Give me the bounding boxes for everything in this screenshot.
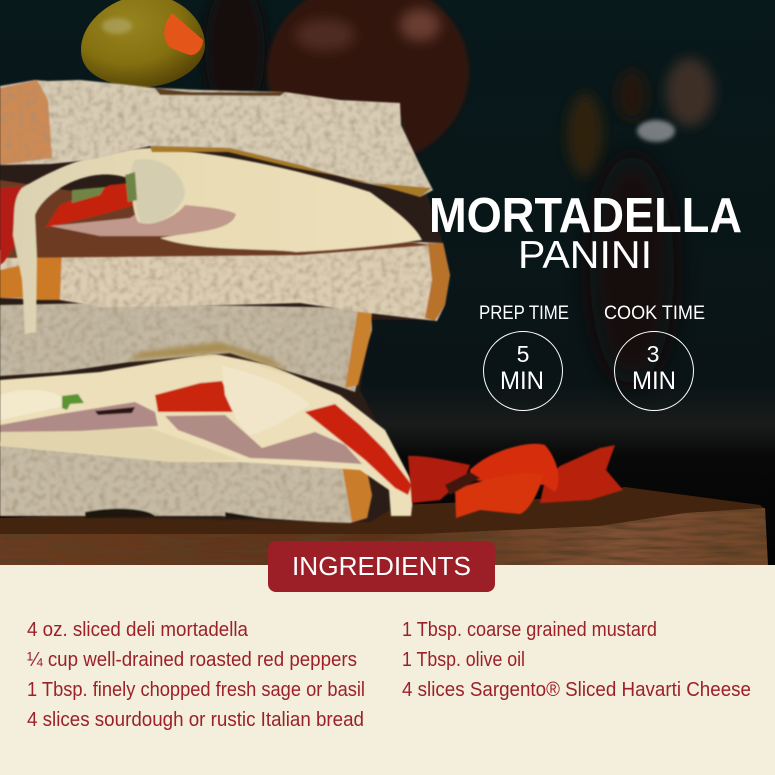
board top surface: [0, 487, 766, 535]
upper fillings: [0, 148, 430, 334]
ingredients left column: [27, 619, 365, 731]
cook time: COOK TIME: [604, 303, 705, 324]
ingredients right column: 1 Tbsp. olive oil: [402, 649, 525, 671]
melted cheese: [13, 148, 422, 334]
prep time: [479, 303, 569, 410]
cook time circle: [614, 332, 694, 410]
ingredients heading: INGREDIENTS: [292, 551, 471, 581]
lower fillings: [0, 353, 413, 516]
prep time: 5: [517, 341, 529, 367]
cook time: MIN: [632, 367, 676, 395]
sandwich backing: [0, 90, 445, 522]
prep time circle: [484, 332, 562, 410]
ingredients right column: [402, 619, 751, 701]
subtitle: PANINI: [518, 234, 652, 277]
cook time: [604, 303, 705, 410]
ingredients left column: 1 Tbsp. finely chopped fresh sage or basil: [27, 679, 365, 701]
ingredients left column: ¼ cup well-drained roasted red peppers: [27, 649, 357, 671]
ingredients panel: [0, 541, 775, 775]
ingredients left column: 4 slices sourdough or rustic Italian bread: [27, 709, 364, 731]
title: [429, 189, 742, 277]
photo background: [0, 0, 775, 565]
pimento: [164, 13, 203, 55]
sandwich: [0, 80, 450, 523]
top bread slice: [0, 80, 433, 197]
ingredients right column: 1 Tbsp. coarse grained mustard: [402, 619, 657, 641]
wooden board: [0, 487, 768, 565]
cook time: 3: [647, 341, 659, 367]
roasted red peppers: [408, 444, 623, 518]
bottom bread slice: [0, 442, 372, 523]
board front face: [0, 508, 768, 565]
prep time: MIN: [500, 367, 544, 395]
ingredients left column: 4 oz. sliced deli mortadella: [27, 619, 249, 641]
ingredients right column: 4 slices Sargento® Sliced Havarti Cheese: [402, 679, 751, 701]
upper bottom bread slice: [0, 240, 450, 321]
middle bread slice: [0, 303, 372, 392]
ingredients heading: [268, 541, 495, 592]
prep time: PREP TIME: [479, 303, 569, 324]
olive: [81, 0, 205, 87]
title: MORTADELLA: [429, 189, 742, 243]
